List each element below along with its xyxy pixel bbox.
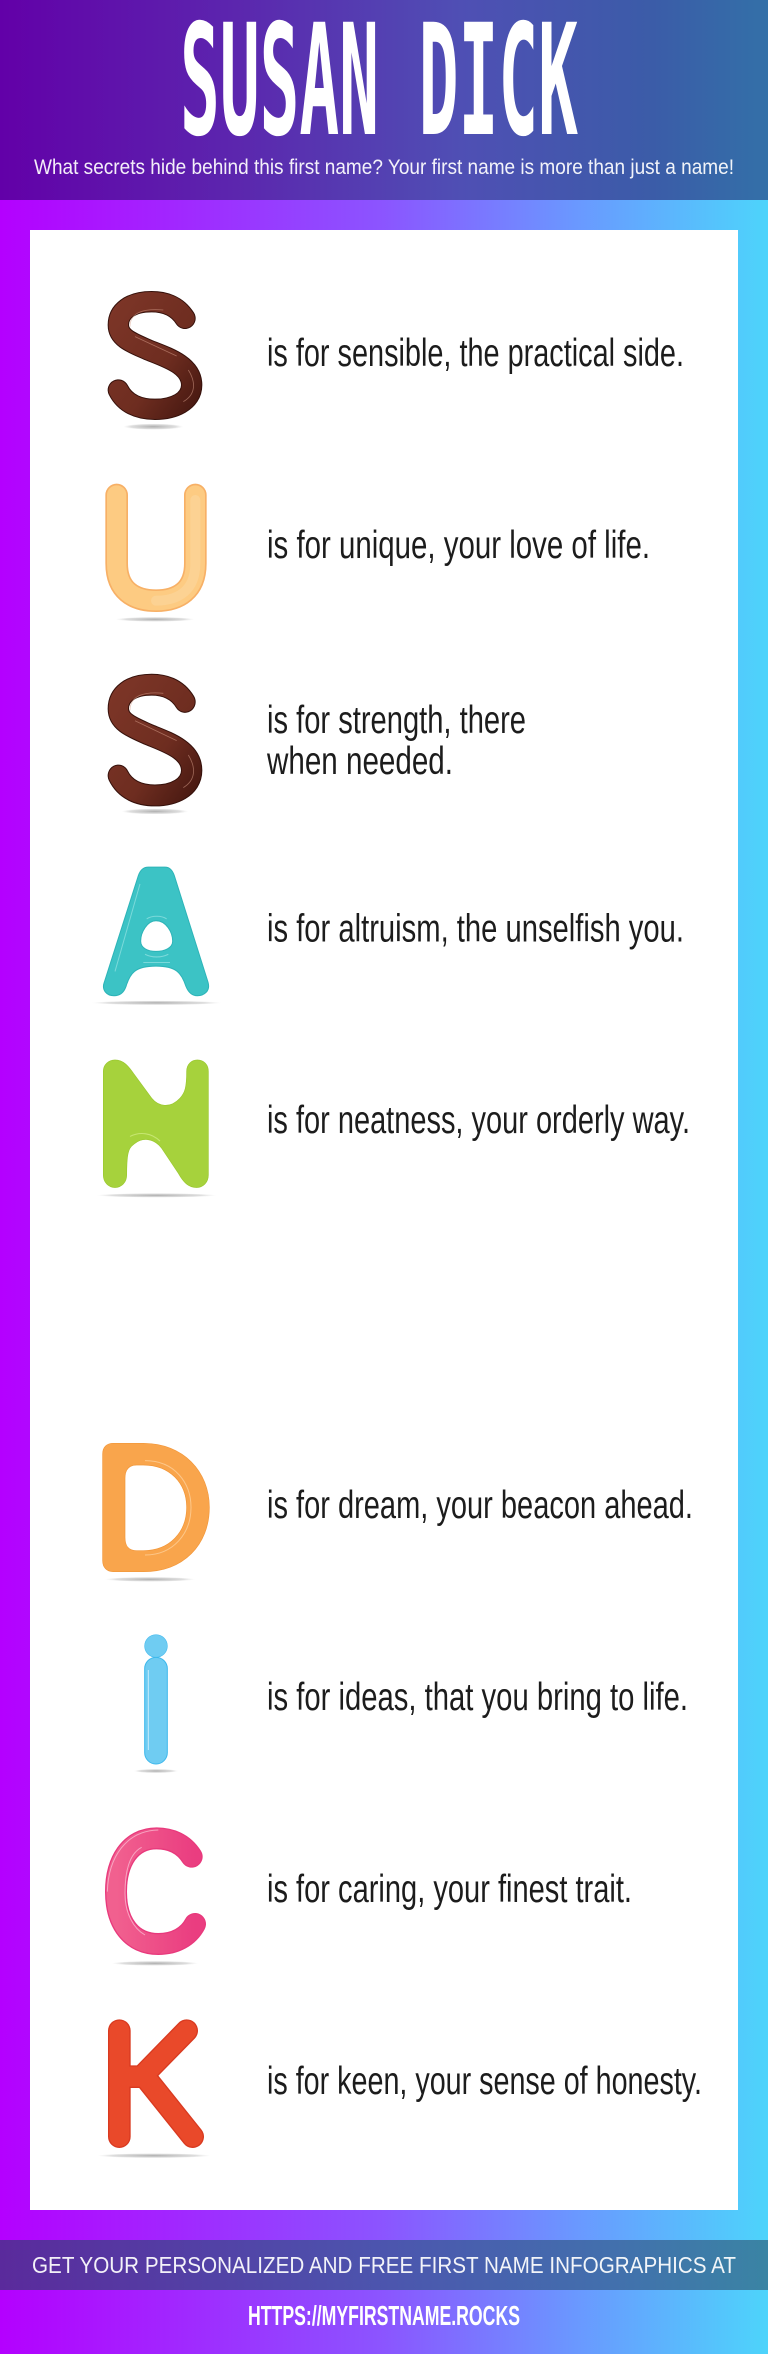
footer band [0,2240,768,2290]
letter i (ideas) [134,1635,178,1773]
text: strength: when needed. [266,740,453,783]
text: strength: is for strength, there [267,699,526,742]
letter S (sensible) [118,302,194,430]
footer url: HTTPS://MYFIRSTNAME.ROCKS [248,2300,520,2331]
letter D (dream) [103,1443,209,1582]
header band [0,0,768,200]
letter C (caring) [107,1830,198,1966]
letter A (altruism) [92,867,222,1005]
white content panel [30,230,738,2210]
text: unique: is for unique, your love of life. [267,524,650,567]
letter K (keen) [97,2031,211,2158]
letter S (strength) [118,685,194,814]
text: caring: is for caring, your finest trait. [267,1868,632,1911]
letter U (unique) [116,495,195,622]
letter N (neatness) [97,1060,217,1197]
text: strength [266,699,526,783]
